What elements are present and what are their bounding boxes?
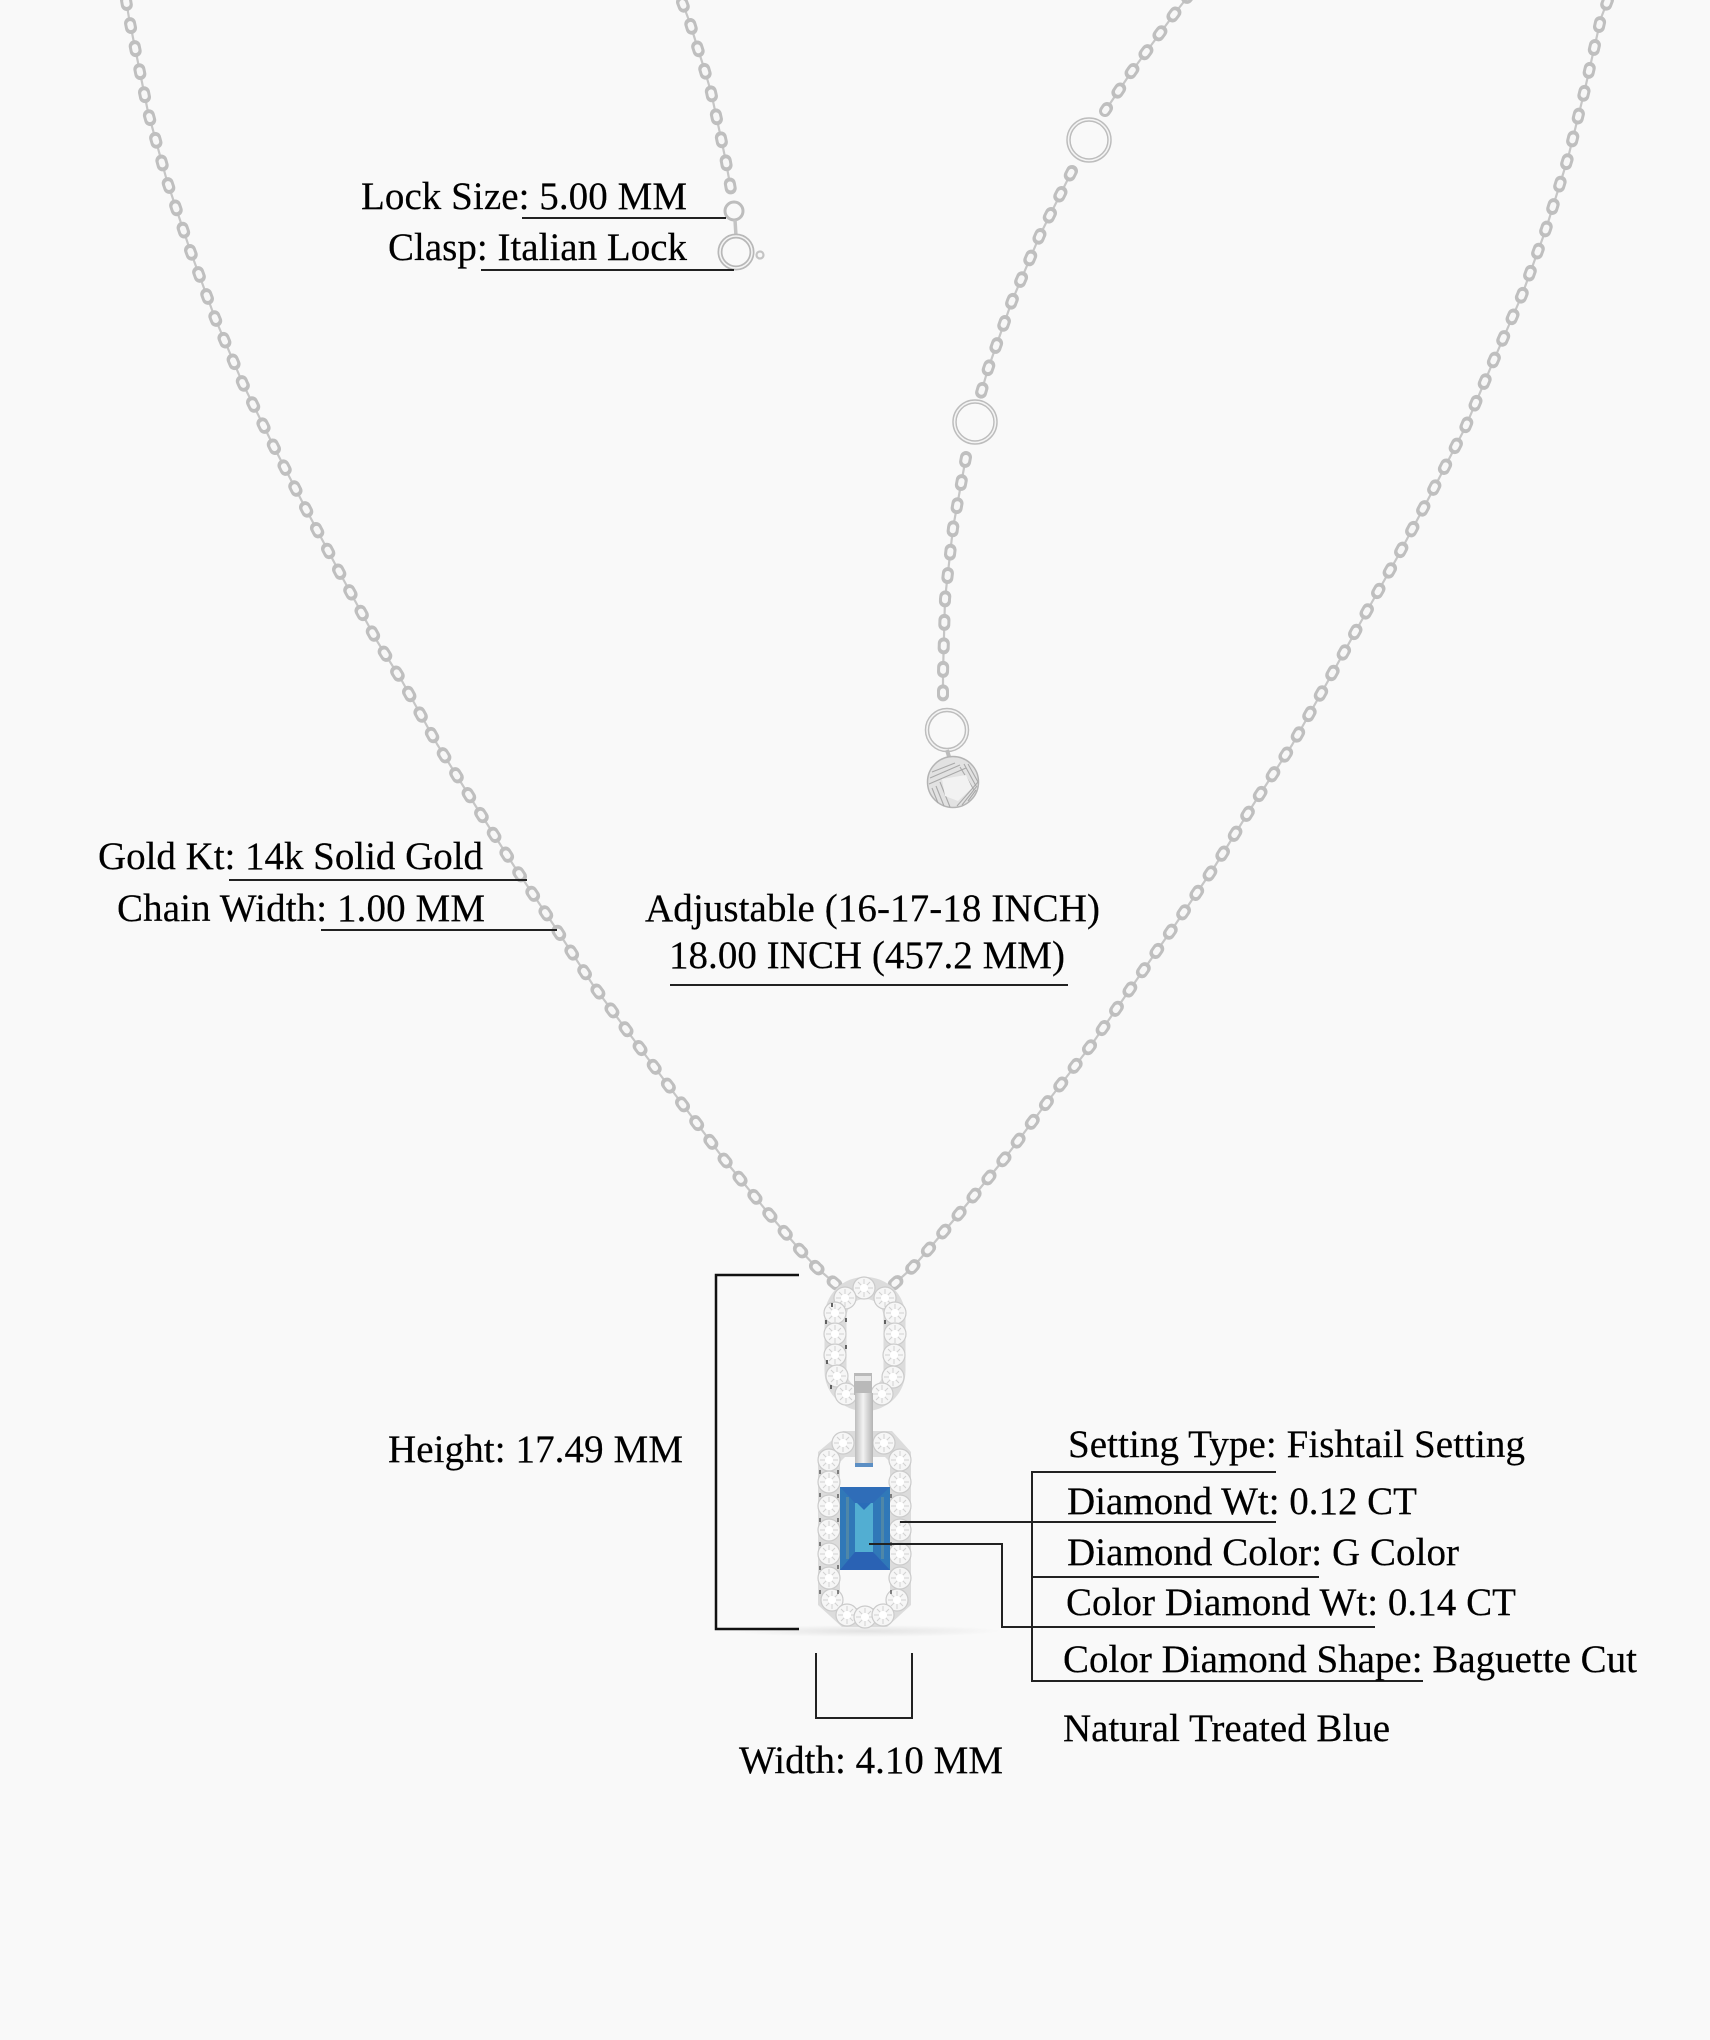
label: adjustable length: Adjustable (16-17-18 INCH) — [645, 887, 1100, 930]
label: setting type: Setting Type: Fishtail Setting — [1068, 1423, 1525, 1466]
leader lines and brackets — [229, 218, 1423, 1718]
label: diamond weight: Diamond Wt: 0.12 CT — [1067, 1480, 1417, 1523]
chain width leader — [321, 929, 557, 931]
label: total length: 18.00 INCH (457.2 MM) — [669, 934, 1065, 977]
clasp leader — [481, 269, 734, 271]
left chain strand — [126, 0, 838, 1286]
icon: clasp ring — [720, 236, 764, 268]
icon: chain end disc — [928, 750, 978, 808]
label: height: Height: 17.49 MM — [388, 1428, 683, 1471]
height bracket — [716, 1275, 799, 1629]
label: lock size: Lock Size: 5.00 MM — [361, 175, 687, 218]
diamond spec leaders — [900, 1472, 1423, 1681]
icon: extension rings — [927, 120, 1110, 750]
label: width: Width: 4.10 MM — [739, 1739, 1003, 1782]
color diamond leader — [869, 1544, 1375, 1627]
pendant shadow — [730, 1625, 1000, 1637]
right chain strand — [892, 0, 1608, 1286]
extension chain — [943, 0, 1190, 700]
label: color diamond shape: Color Diamond Shape: Baguette Cut — [1063, 1638, 1637, 1681]
label: chain width: Chain Width: 1.00 MM — [117, 887, 485, 930]
bottom diamond octagon link — [818, 1431, 911, 1628]
label: gold karat: Gold Kt: 14k Solid Gold — [98, 835, 484, 878]
necklace chain — [126, 0, 1608, 1286]
width bracket — [816, 1653, 912, 1718]
label: clasp: Clasp: Italian Lock — [388, 226, 688, 269]
label: stone type: Natural Treated Blue — [1063, 1707, 1390, 1750]
label: color diamond weight: Color Diamond Wt: 0.14 CT — [1066, 1581, 1516, 1624]
label: diamond color: Diamond Color: G Color — [1067, 1531, 1459, 1574]
top diamond oval link — [824, 1277, 906, 1405]
blue baguette gemstone — [840, 1487, 890, 1570]
lock size leader — [522, 217, 726, 219]
clasp chain — [682, 2, 743, 236]
gold karat leader — [229, 879, 527, 881]
length underline — [670, 984, 1068, 986]
pendant — [730, 1277, 1000, 1637]
bail connector — [854, 1373, 873, 1467]
